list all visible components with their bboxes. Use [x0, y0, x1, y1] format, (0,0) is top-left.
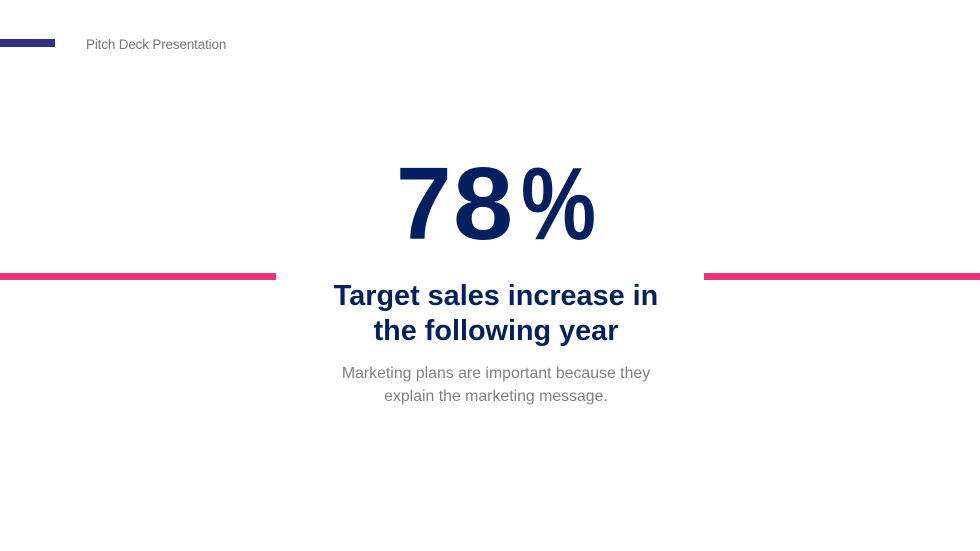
- big stat: 78%: 7: [396, 146, 452, 261]
- pink divider left: [0, 273, 276, 280]
- pink divider right: [704, 273, 980, 280]
- heading: Target sales increase in: [334, 280, 658, 312]
- description: Marketing plans are important because they: [342, 365, 650, 382]
- big stat: 78%: [396, 146, 596, 261]
- header label: Pitch Deck Presentation: [86, 36, 226, 52]
- accent bar: top left: [0, 39, 55, 47]
- heading: the following year: [374, 314, 618, 346]
- heading: [334, 280, 658, 346]
- description: explain the marketing message.: [384, 388, 608, 405]
- big stat: 78%: %: [521, 146, 596, 261]
- description: [342, 365, 650, 405]
- big stat: 78%: 8: [453, 146, 513, 261]
